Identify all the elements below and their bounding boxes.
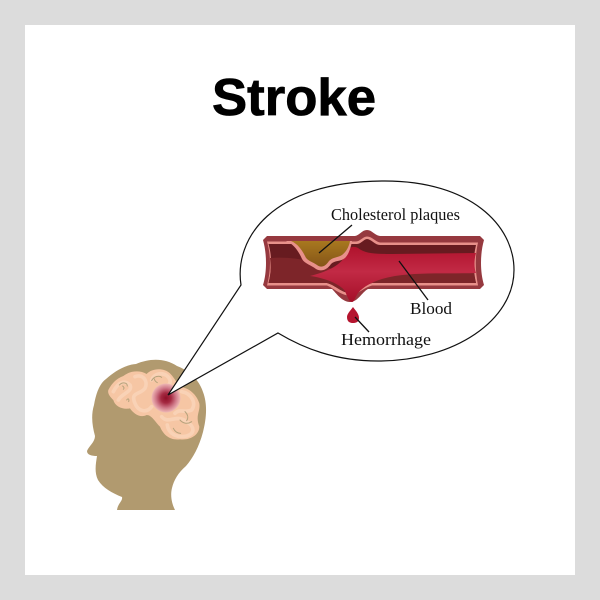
artery lumen — [268, 239, 476, 293]
hemorrhage spot — [152, 384, 180, 412]
artery pink lining — [267, 236, 478, 296]
label: blood: Blood — [410, 299, 453, 318]
chart: artery cross-section — [263, 230, 484, 302]
blood flow — [310, 247, 476, 302]
title: Stroke — [212, 69, 376, 127]
label: cholesterol plaques: Cholesterol plaques — [331, 205, 460, 224]
icon: head with brain — [87, 360, 206, 510]
brain — [108, 369, 200, 440]
callout bubble — [168, 181, 514, 395]
head silhouette — [87, 360, 206, 510]
leader lines — [319, 225, 428, 332]
icon: blood drop — [347, 307, 359, 323]
cholesterol plaque — [286, 241, 352, 270]
artery outer wall — [263, 230, 484, 302]
label: hemorrhage: Hemorrhage — [341, 330, 431, 349]
